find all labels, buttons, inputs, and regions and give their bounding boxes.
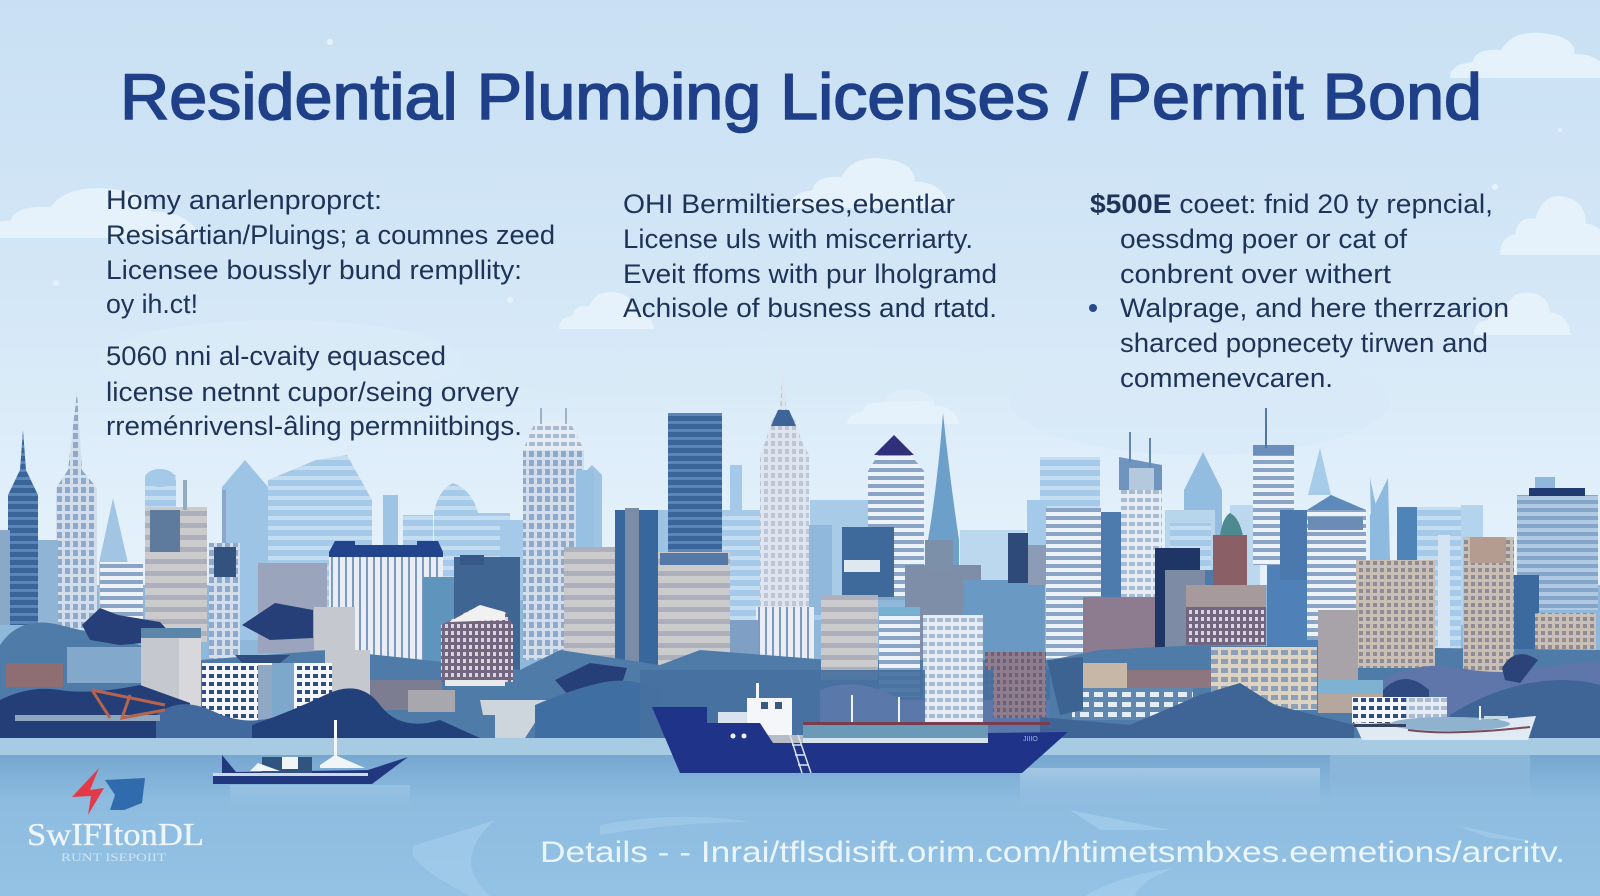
text column 2: License uls with miscerriarty. xyxy=(623,224,973,254)
small boat xyxy=(213,720,408,784)
text column 2: Eveit ffoms with pur lholgramd xyxy=(623,259,997,289)
text column 3: oessdmg poer or cat of xyxy=(1120,224,1408,254)
skyline xyxy=(0,365,1600,740)
front-left buildings xyxy=(6,603,627,723)
clouds xyxy=(0,33,1600,455)
text column 1: Licensee bousslyr bund rempllity: xyxy=(106,255,522,285)
logo name: SwIFItonDL xyxy=(27,816,204,852)
front-right buildings xyxy=(821,513,1514,725)
logo icon: blue mark xyxy=(105,778,145,810)
far pale buildings xyxy=(99,448,1483,640)
pier xyxy=(15,715,160,721)
right white ferry xyxy=(1354,706,1536,740)
text column 3: sharced popnecety tirwen and xyxy=(1120,328,1488,358)
logo tagline: RUNT ISEPOIIT xyxy=(61,850,167,864)
large cargo ship xyxy=(652,683,1068,773)
text column 2 xyxy=(623,189,997,323)
back tree and ground band xyxy=(0,622,1600,740)
logo icon: red bolt xyxy=(72,768,104,815)
empire tower xyxy=(730,365,814,670)
text column 1: Homy anarlenproprct: xyxy=(106,185,382,215)
text column 3: commenevcaren. xyxy=(1120,363,1333,393)
footer details line: Details - - Inrai/tflsdisift.orim.com/htimetsmbxes.eemetions/arcritv. xyxy=(540,836,1565,869)
text column 1: 5060 nni al-cvaity equasced xyxy=(106,341,446,371)
text column 3: Walprage, and here therrzarion xyxy=(1120,293,1509,323)
city backing xyxy=(0,585,1600,740)
text column 3: conbrent over withert xyxy=(1120,259,1392,289)
text column 3: $500E coeet: fnid 20 ty repncial, xyxy=(1090,189,1493,219)
water xyxy=(0,738,1600,896)
text column 1: Resisártian/Pluings; a coumnes zeed xyxy=(106,220,555,250)
mid buildings xyxy=(145,413,730,682)
title: Residential Plumbing Licenses / Permit Bond xyxy=(120,60,1482,133)
center-right towers xyxy=(842,408,1598,672)
text column 2: Achisole of busness and rtatd. xyxy=(623,293,997,323)
text column 2: OHI Bermiltierses,ebentlar xyxy=(623,189,955,219)
waterfront trees xyxy=(0,615,1600,740)
bullet xyxy=(1089,304,1097,312)
text column 1: license netnnt cupor/seing orvery xyxy=(106,377,520,407)
text column 1 xyxy=(106,185,555,441)
left towers xyxy=(0,392,594,660)
logo xyxy=(27,768,204,864)
text column 1: oy ih.ct! xyxy=(106,289,198,319)
text column 3 xyxy=(1089,189,1509,393)
red crane xyxy=(92,690,165,718)
large cargo ship: JIIIO xyxy=(1023,736,1038,743)
text column 1: rreménrivensl-âling permniitbings. xyxy=(106,411,522,441)
